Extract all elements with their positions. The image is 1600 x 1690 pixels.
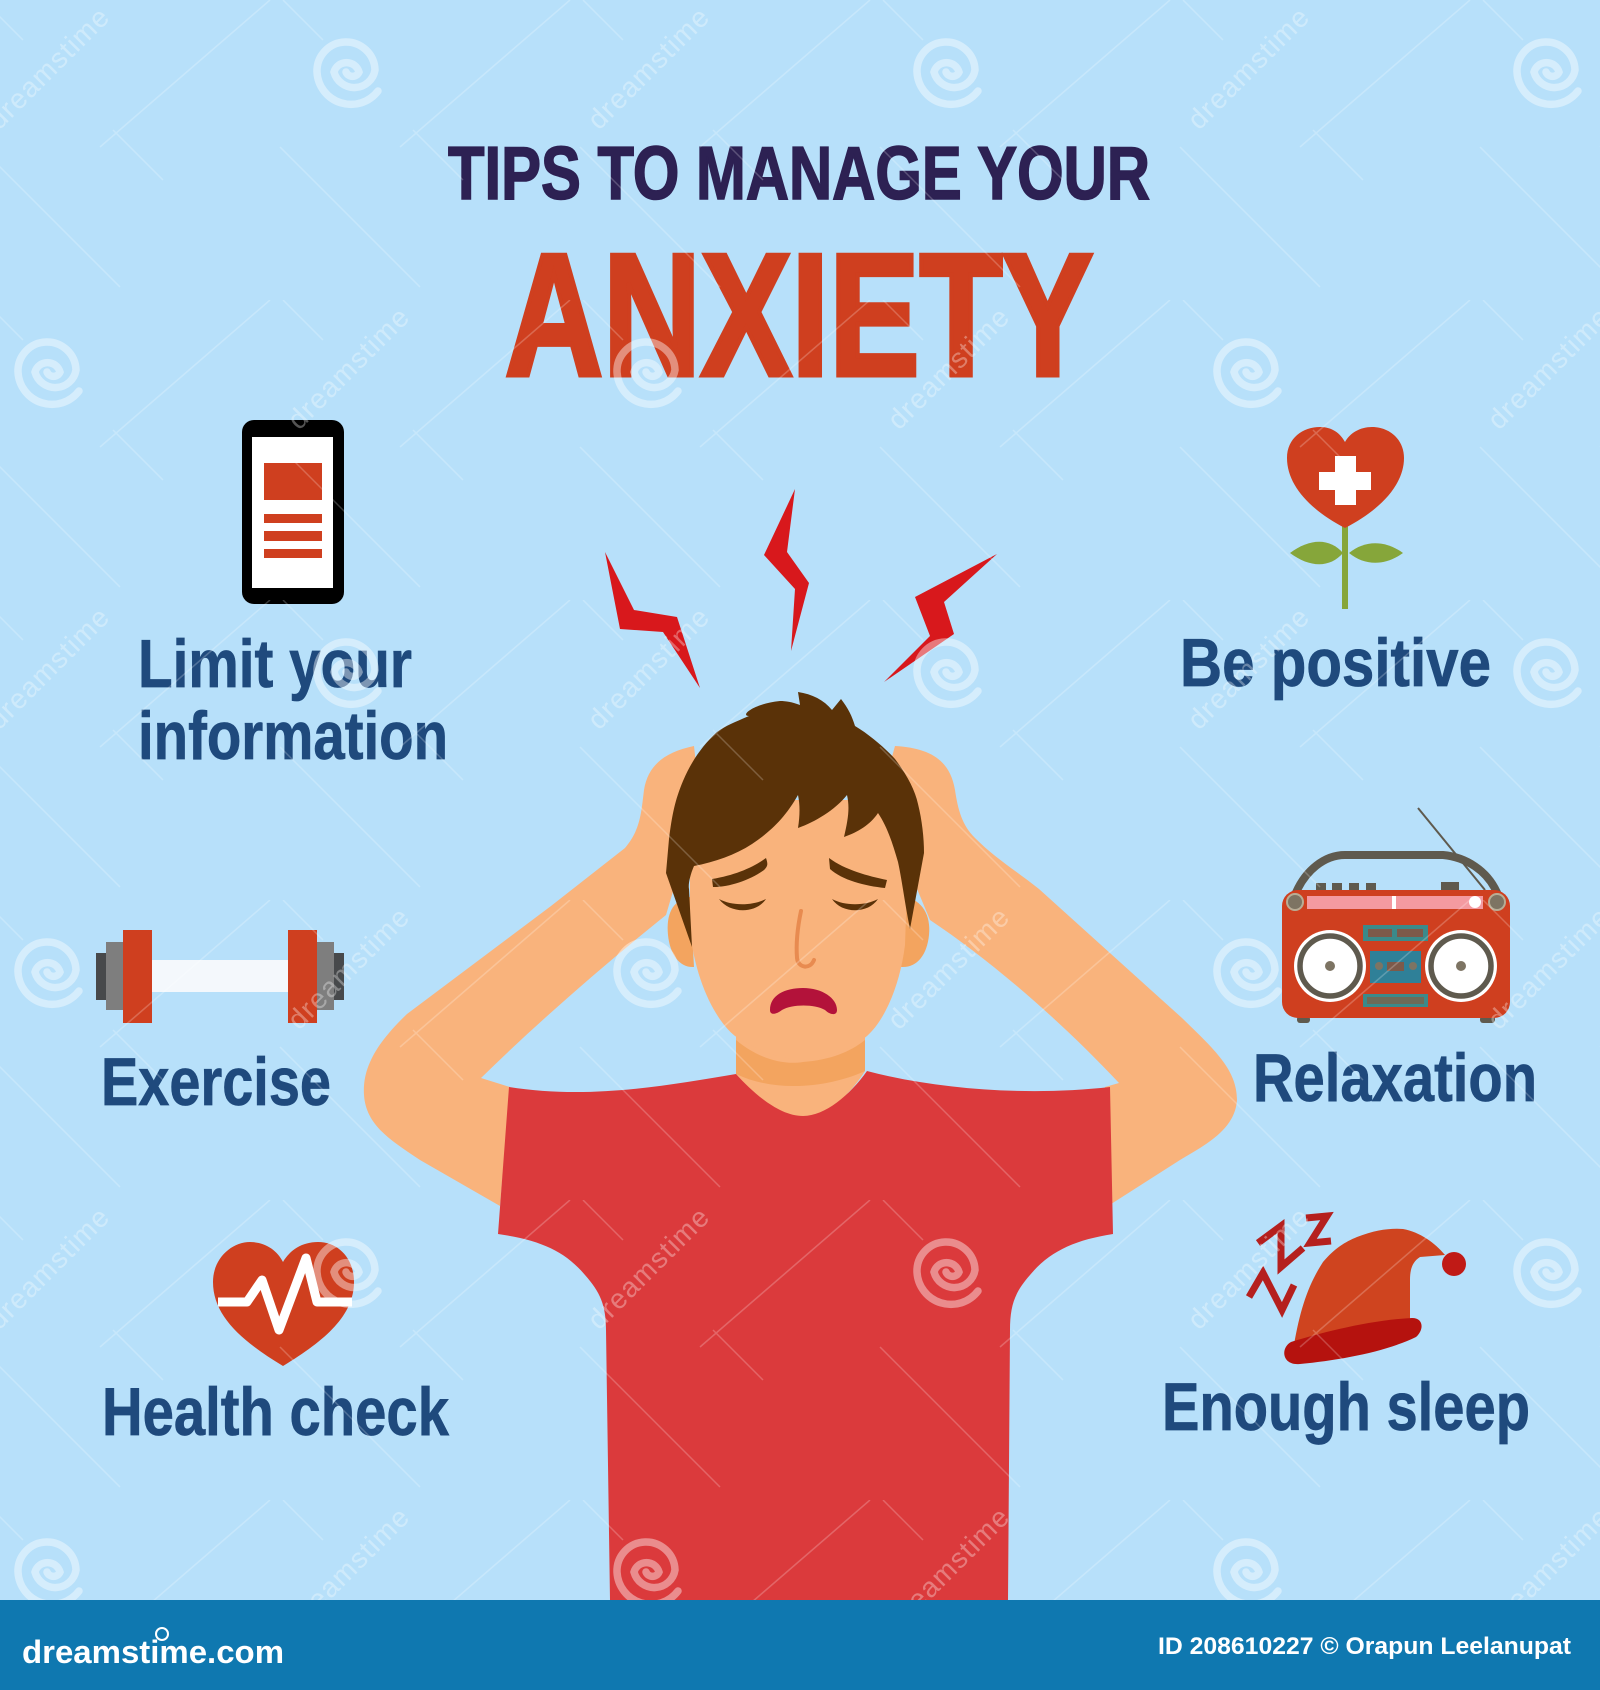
label: be positive: Be positive [1180, 625, 1491, 701]
watermark text: dreamstime [581, 602, 715, 735]
neck shadow [736, 1040, 865, 1086]
label: limit your information: Limit your [138, 626, 412, 702]
watermark text: dreamstime [581, 2, 715, 135]
watermark text: dreamstime [881, 902, 1015, 1035]
stress lightning bolts [605, 489, 997, 688]
footer credit: ID 208610227 © Orapun Leelanupat [1158, 1633, 1571, 1660]
icon: dumbbell [96, 930, 344, 1023]
icon: heart with pulse [213, 1242, 354, 1366]
label: health check: Health check [102, 1374, 449, 1450]
title: anxiety: ANXIETY [505, 217, 1093, 412]
eyes [719, 899, 878, 910]
shirt [498, 1071, 1113, 1600]
watermark text: dreamstime [1181, 602, 1315, 735]
mouth [770, 988, 837, 1014]
stressed man illustration [364, 692, 1237, 1600]
eyebrows [712, 858, 887, 888]
watermark text: dreamstime [881, 302, 1015, 435]
watermark text: dreamstime [281, 1502, 415, 1635]
footer logo mark [156, 1628, 168, 1640]
icon: heart flower [1287, 427, 1404, 609]
label: relaxation: Relaxation [1253, 1040, 1537, 1116]
label: enough sleep: Enough sleep [1162, 1369, 1530, 1445]
title line: tips to manage your: TIPS TO MANAGE YOUR [448, 131, 1150, 215]
label: exercise: Exercise [101, 1044, 331, 1120]
watermark text: dreamstime [281, 902, 415, 1035]
icon: phone [242, 420, 344, 604]
watermark text: dreamstime [1181, 2, 1315, 135]
footer bar [0, 1600, 1600, 1690]
icon: sleeping cap with Zs [1249, 1216, 1466, 1364]
watermark text: dreamstime [1181, 1202, 1315, 1335]
watermark text: dreamstime [581, 1202, 715, 1335]
label: limit your information: information [138, 698, 448, 774]
neck [736, 1000, 865, 1118]
left arm [364, 746, 700, 1206]
hair [666, 692, 924, 947]
icon: boombox radio [1282, 808, 1510, 1023]
right arm [880, 746, 1237, 1206]
watermark text: dreamstime [881, 1502, 1015, 1635]
nose [797, 911, 814, 967]
face [690, 800, 910, 1060]
watermark text: dreamstime [281, 302, 415, 435]
ears [668, 897, 929, 967]
footer logo text: dreamstime.com [22, 1634, 284, 1670]
label: limit your information [138, 626, 448, 774]
